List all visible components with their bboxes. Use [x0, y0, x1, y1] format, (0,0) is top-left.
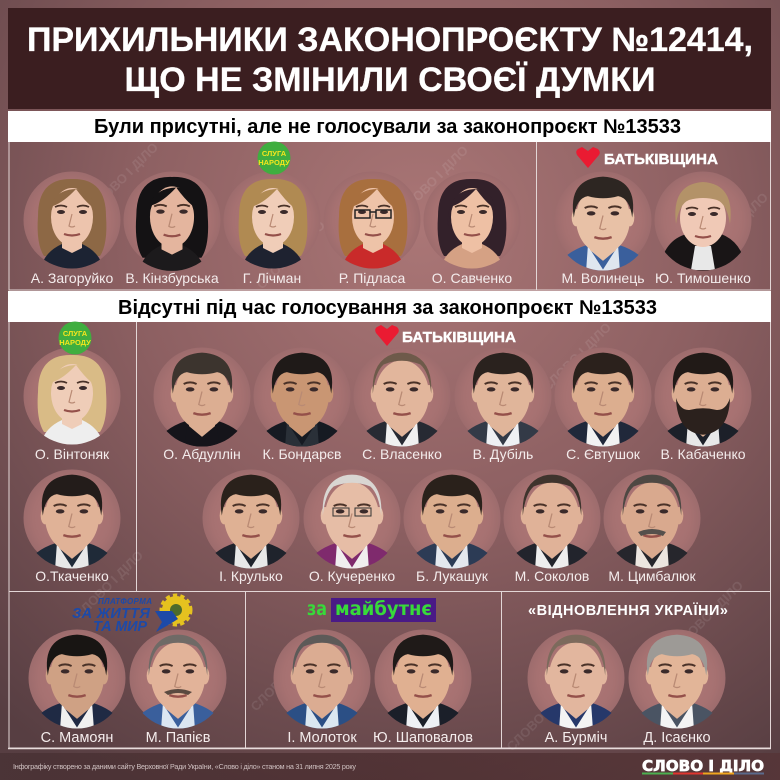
person: І. Крулько: І. Крулько	[219, 568, 283, 584]
person: В. Дубіль: В. Дубіль	[473, 446, 533, 462]
watermarks: СЛОВО І ДІЛО	[697, 190, 771, 264]
person: В. Кінзбурська: В. Кінзбурська	[125, 270, 219, 286]
person: К. Бондарєв: К. Бондарєв	[263, 446, 341, 462]
watermarks	[72, 140, 771, 754]
logo: Слово і діло: СЛОВО І ДІЛО	[642, 757, 764, 775]
person: В. Кабаченко: В. Кабаченко	[660, 446, 746, 462]
person: М. Волинець: М. Волинець	[561, 270, 645, 286]
heading: present but not voting: Були присутні, але не голосували за законопроєкт №13533	[94, 116, 681, 138]
footer source note: Інфографіку створено за даними сайту Верховної Ради України, «Слово і діло» станом на 31 липня 2025 року	[13, 762, 356, 771]
person: С. Власенко: С. Власенко	[362, 446, 442, 462]
badge: Слуга народу	[258, 142, 290, 174]
person: І. Молоток	[274, 630, 370, 746]
person: М. Цимбалюк	[604, 470, 700, 584]
person: Ю. Шаповалов	[373, 630, 473, 746]
person: В. Кабаченко	[654, 348, 752, 462]
logo: Платформа за життя та мир: ЗА ЖИТТЯ	[72, 606, 150, 622]
person: М. Волинець	[554, 172, 652, 286]
title text: ЩО НЕ ЗМІНИЛИ СВОЄЇ ДУМКИ	[124, 61, 656, 99]
person: А. Загоруйко: А. Загоруйко	[31, 270, 113, 286]
person: О. Абдуллін: О. Абдуллін	[163, 446, 241, 462]
logo: Платформа за життя та мир: ПЛАТФОРМА	[98, 597, 152, 606]
person: С. Євтушок: С. Євтушок	[566, 446, 641, 462]
person: О.Ткаченко	[24, 470, 120, 584]
person: С. Мамоян: С. Мамоян	[41, 730, 113, 746]
logo: Батьківщина (middle): БАТЬКІВЩИНА	[402, 329, 516, 346]
person: А. Бурміч: А. Бурміч	[545, 730, 607, 746]
logo: за майбутнє: за	[307, 598, 327, 620]
person: С. Мамоян	[28, 630, 126, 746]
watermarks: СЛОВО І ДІЛО	[87, 140, 161, 214]
heading: absent during vote: Відсутні під час голосування за законопроєкт №13533	[118, 297, 657, 319]
person: Г. Лічман	[224, 172, 320, 286]
person: І. Молоток: І. Молоток	[287, 730, 357, 746]
logo: Батьківщина (top)	[576, 147, 718, 168]
person: Д. Ісаєнко	[628, 630, 726, 746]
logo: Платформа за життя та мир: ТА МИР	[93, 619, 147, 635]
footer band	[0, 753, 780, 780]
badge: Слуга народу (left): НАРОДУ	[59, 338, 91, 347]
person: С. Власенко	[356, 352, 446, 459]
sunflower	[155, 596, 190, 632]
person: М. Цимбалюк: М. Цимбалюк	[608, 568, 697, 584]
person: О. Вінтоняк	[24, 348, 120, 462]
person: О. Вінтоняк: О. Вінтоняк	[35, 446, 110, 462]
watermarks: СЛОВО І ДІЛО	[540, 320, 614, 394]
person: А. Бурміч	[528, 630, 624, 746]
badge: Слуга народу (left)	[58, 322, 92, 354]
person: О. Кучеренко	[304, 470, 400, 584]
watermarks: СЛОВО І ДІЛО	[254, 218, 328, 292]
person: М. Соколов	[504, 470, 600, 584]
person: Р. Підласа: Р. Підласа	[339, 270, 405, 286]
person: Ю. Шаповалов: Ю. Шаповалов	[373, 730, 473, 746]
logo: Батьківщина (middle)	[375, 325, 516, 346]
person: Б. Лукашук: Б. Лукашук	[416, 568, 489, 584]
person: Ю. Тимошенко: Ю. Тимошенко	[655, 270, 751, 286]
logo: Платформа за життя та мир	[72, 596, 190, 635]
logo: Відновлення України: «ВІДНОВЛЕННЯ УКРАЇНИ»	[528, 602, 728, 619]
logo: Батьківщина (top): БАТЬКІВЩИНА	[604, 151, 718, 168]
person: Б. Лукашук	[404, 470, 500, 584]
person: О. Савченко	[424, 179, 512, 283]
watermarks: СЛОВО І ДІЛО	[397, 143, 471, 217]
person: О. Абдуллін	[154, 348, 250, 462]
watermarks: СЛОВО І ДІЛО	[672, 578, 746, 652]
badge: Слуга народу: НАРОДУ	[258, 158, 290, 167]
title panel	[8, 8, 771, 109]
heading: absent during vote	[8, 291, 771, 322]
watermarks: СЛОВО І ДІЛО	[72, 548, 146, 622]
person: М. Папієв: М. Папієв	[146, 730, 211, 746]
person: В. Дубіль	[454, 348, 552, 462]
person: М. Папієв	[130, 630, 226, 746]
watermarks: СЛОВО І ДІЛО	[504, 680, 578, 754]
person: К. Бондарєв	[254, 348, 350, 462]
heading: present but not voting	[8, 111, 771, 142]
person: С. Євтушок	[554, 348, 652, 462]
watermarks: СЛОВО І ДІЛО	[248, 640, 322, 714]
badge: Слуга народу (left): СЛУГА	[63, 329, 88, 338]
person: Р. Підласа	[338, 179, 420, 286]
person: О. Савченко: О. Савченко	[432, 270, 512, 286]
person: М. Соколов: М. Соколов	[515, 568, 589, 584]
person: А. Загоруйко	[24, 172, 120, 286]
badge: Слуга народу: СЛУГА	[262, 149, 287, 158]
person: О. Кучеренко: О. Кучеренко	[309, 568, 395, 584]
person: І. Крулько	[202, 470, 300, 584]
person: Ю. Тимошенко	[654, 172, 752, 286]
title text: ПРИХИЛЬНИКИ ЗАКОНОПРОЄКТУ №12414,	[27, 21, 753, 59]
logo: за майбутнє: майбутнє	[335, 598, 432, 620]
person: О.Ткаченко: О.Ткаченко	[35, 568, 109, 584]
person: Д. Ісаєнко: Д. Ісаєнко	[643, 730, 711, 746]
person: Г. Лічман: Г. Лічман	[243, 270, 301, 286]
person: В. Кінзбурська	[124, 172, 220, 286]
